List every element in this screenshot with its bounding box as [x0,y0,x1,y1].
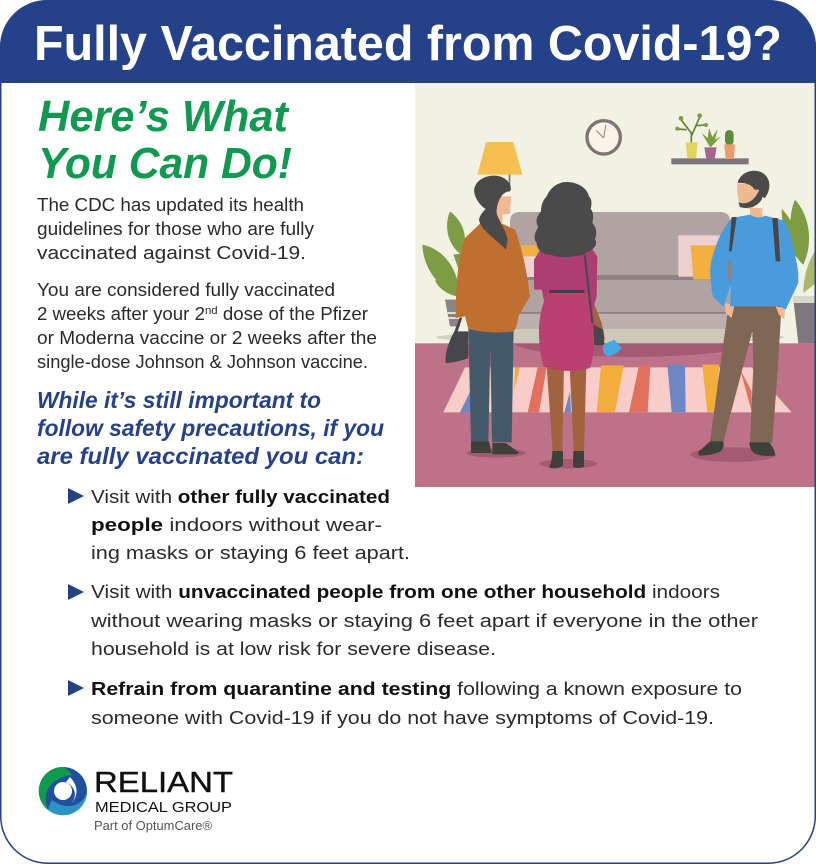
illustration: people in a living room [415,83,816,487]
definition paragraph [37,280,377,372]
bullet 3: someone with Covid-19 if you do not have symptoms of Covid-19. [91,708,714,728]
person: man in blue shirt [691,171,798,462]
logo: Reliant Medical Group: Part of OptumCare® [94,818,212,833]
person: woman in brown coat [446,176,530,458]
person: woman in pink dress [534,182,622,468]
definition paragraph: nd [205,305,218,317]
intro paragraph: vaccinated against Covid-19. [37,243,306,263]
blue subheading: are fully vaccinated you can: [37,443,364,469]
logo: Reliant Medical Group: RELIANT [94,767,233,799]
floor [415,343,816,487]
sofa cushions [521,235,722,280]
definition paragraph: or Moderna vaccine or 2 weeks after the [37,328,377,348]
bullet 3 [68,679,742,728]
logo: Reliant Medical Group: MEDICAL GROUP [95,799,232,816]
green heading: Here’s What [38,92,290,141]
header banner [0,0,816,83]
sofa [436,212,784,343]
wall shelf with plants [671,113,749,164]
title: Fully Vaccinated from Covid-19? [34,17,782,71]
bullet 2 [68,582,758,659]
bullet 1: Visit with other fully vaccinated [91,487,390,507]
bullet 1: ing masks or staying 6 feet apart. [91,543,410,563]
bullet 2: household is at low risk for severe disease. [91,639,496,659]
wall clock [587,121,620,154]
right plant pot [793,296,816,343]
blue subheading [37,387,384,469]
striped rug [443,365,792,412]
definition paragraph: You are considered fully vaccinated [37,280,335,300]
intro paragraph: The CDC has updated its health [37,195,304,215]
right plant [782,200,816,293]
definition paragraph: dose of the Pfizer [218,304,368,324]
green heading [38,92,292,188]
definition paragraph: single-dose Johnson & Johnson vaccine. [37,352,368,372]
bullet 2: without wearing masks or staying 6 feet apart if everyone in the other [90,611,758,631]
green heading: You Can Do! [38,139,292,188]
left plant pot [445,300,460,326]
bullet 1: people indoors without wear- [91,515,382,535]
floor lamp [477,142,522,186]
bullet 1 [68,487,410,563]
intro paragraph [37,195,314,263]
intro paragraph: guidelines for those who are fully [37,219,314,239]
bullet 2: Visit with unvaccinated people from one other household indoors [91,582,720,602]
blue subheading: follow safety precautions, if you [37,415,384,441]
logo swirl icon [39,767,87,815]
blue subheading: While it’s still important to [37,387,321,413]
bullet 3: Refrain from quarantine and testing following a known exposure to [91,679,742,699]
floor shadow [513,343,753,357]
logo: Reliant Medical Group [39,767,233,833]
definition paragraph: 2 weeks after your 2 [37,304,199,324]
left plant [422,211,465,296]
